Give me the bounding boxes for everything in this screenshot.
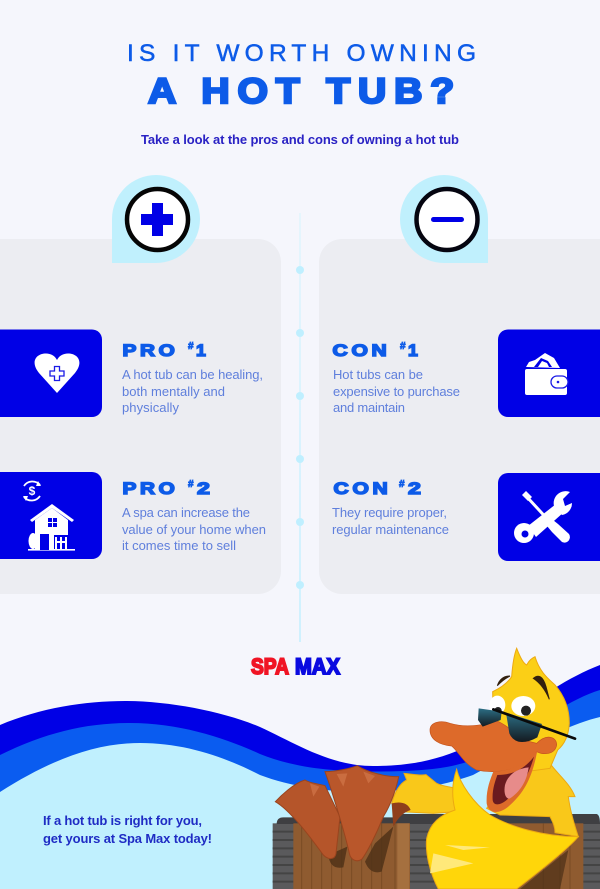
panel: pro 1 icon box xyxy=(0,330,102,417)
heading: pro 1: 1 xyxy=(196,341,209,360)
text: call to action: get yours at Spa Max today! xyxy=(43,831,212,846)
sunglasses xyxy=(478,708,575,742)
panel: pros background xyxy=(0,239,281,594)
heading: pro 1: PRO xyxy=(122,341,178,360)
heading: pro 1 xyxy=(122,341,209,360)
hot tub xyxy=(273,814,600,889)
text: pro 2: value of your home when xyxy=(122,522,266,537)
text: call to action: If a hot tub is right for you, xyxy=(43,813,202,828)
illustration: duck in hot tub xyxy=(273,648,600,889)
text: con 1 xyxy=(333,367,460,415)
panel: con 2 icon box xyxy=(498,473,600,561)
heading: con 1: # xyxy=(400,341,406,352)
heading: pro 2 xyxy=(122,479,214,498)
heading: pro 2: PRO xyxy=(122,479,178,498)
text: con 2: regular maintenance xyxy=(332,522,449,537)
eyes xyxy=(489,696,535,716)
text: pro 1: both mentally and xyxy=(122,384,225,399)
icon: plus badge xyxy=(112,175,200,263)
heading: con 1 xyxy=(332,341,421,360)
logo: MAX xyxy=(295,654,340,679)
icon: tools xyxy=(514,491,572,543)
panel: con 1 icon box xyxy=(498,330,600,417)
logo xyxy=(251,654,340,679)
text: pro 2: it comes time to sell xyxy=(122,538,236,553)
text: con 2 xyxy=(332,505,449,537)
heading: con 2: # xyxy=(399,479,405,490)
wing xyxy=(426,769,578,889)
title: IS IT WORTH OWNING xyxy=(127,40,476,67)
mouth xyxy=(487,751,537,812)
text: call to action xyxy=(43,813,212,846)
timeline xyxy=(296,213,304,642)
heading: pro 2: # xyxy=(188,479,194,490)
text: pro 1: A hot tub can be healing, xyxy=(122,367,263,382)
icon: wallet xyxy=(525,353,568,395)
title: A HOT TUB? xyxy=(148,72,462,111)
waves xyxy=(0,665,600,889)
panel: cons background xyxy=(319,239,600,594)
icon: heart with cross xyxy=(35,354,79,393)
heading: pro 2: 2 xyxy=(197,479,214,498)
text: con 1: and maintain xyxy=(333,400,405,415)
heading: con 1: CON xyxy=(332,341,390,360)
heading: con 1: 1 xyxy=(408,341,421,360)
heading: con 2: 2 xyxy=(408,479,425,498)
arm xyxy=(392,773,457,813)
subtitle: Take a look at the pros and cons of owning a hot tub xyxy=(141,132,459,147)
duck body xyxy=(487,763,578,837)
panel: pro 2 icon box xyxy=(0,472,102,559)
head xyxy=(493,648,569,773)
text: pro 2 xyxy=(122,505,266,553)
logo: SPA xyxy=(251,654,289,679)
title xyxy=(127,40,476,111)
flippers xyxy=(275,766,411,861)
text: pro 2: A spa can increase the xyxy=(122,505,250,520)
text: con 1: expensive to purchase xyxy=(333,384,460,399)
text: pro 1 xyxy=(122,367,263,415)
icon: house value: $ xyxy=(29,484,36,498)
text: con 1: Hot tubs can be xyxy=(333,367,423,382)
heading: con 2 xyxy=(334,479,425,498)
eyebrows xyxy=(497,676,549,699)
beak xyxy=(430,720,557,772)
text: con 2: They require proper, xyxy=(332,505,447,520)
text: pro 1: physically xyxy=(122,400,180,415)
icon: minus badge xyxy=(400,175,488,263)
heading: con 2: CON xyxy=(334,479,392,498)
heading: pro 1: # xyxy=(188,341,194,352)
